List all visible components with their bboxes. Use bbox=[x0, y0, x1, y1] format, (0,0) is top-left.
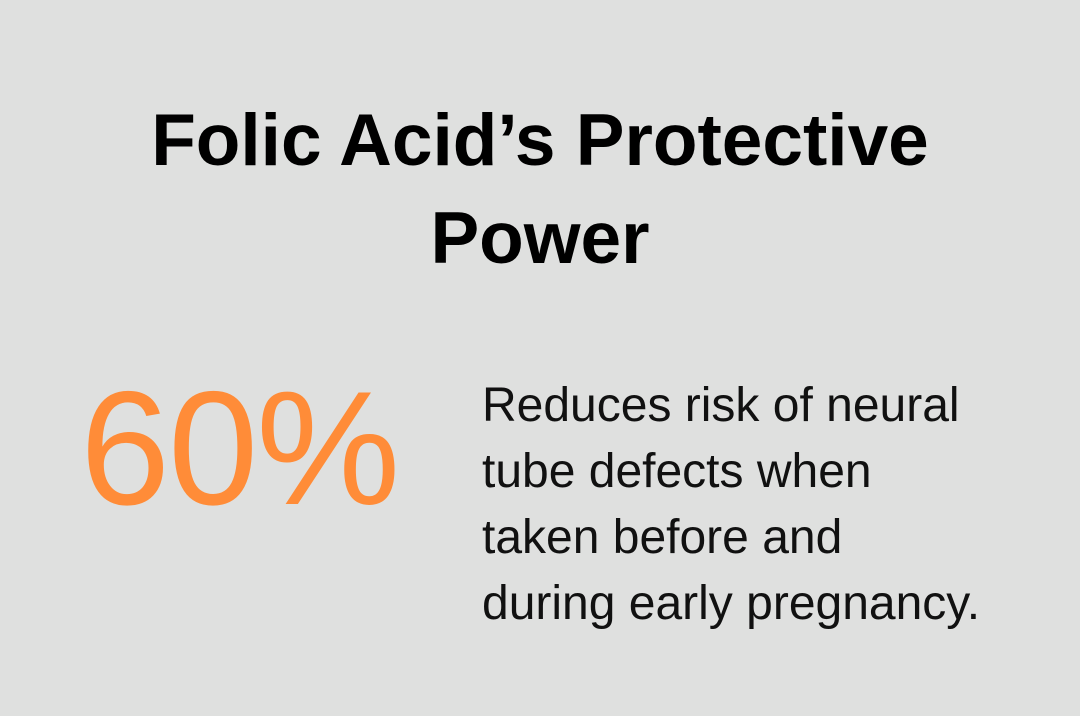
description text: tube defects when bbox=[482, 445, 872, 498]
title bbox=[151, 100, 929, 279]
description text: Reduces risk of neural bbox=[482, 379, 960, 432]
description text bbox=[482, 379, 980, 630]
big stat: 60%: 60% bbox=[80, 358, 398, 539]
title: Folic Acid’s Protective bbox=[151, 100, 929, 181]
description text: taken before and bbox=[482, 511, 842, 564]
description text: during early pregnancy. bbox=[482, 577, 980, 630]
title: Power bbox=[430, 198, 650, 279]
